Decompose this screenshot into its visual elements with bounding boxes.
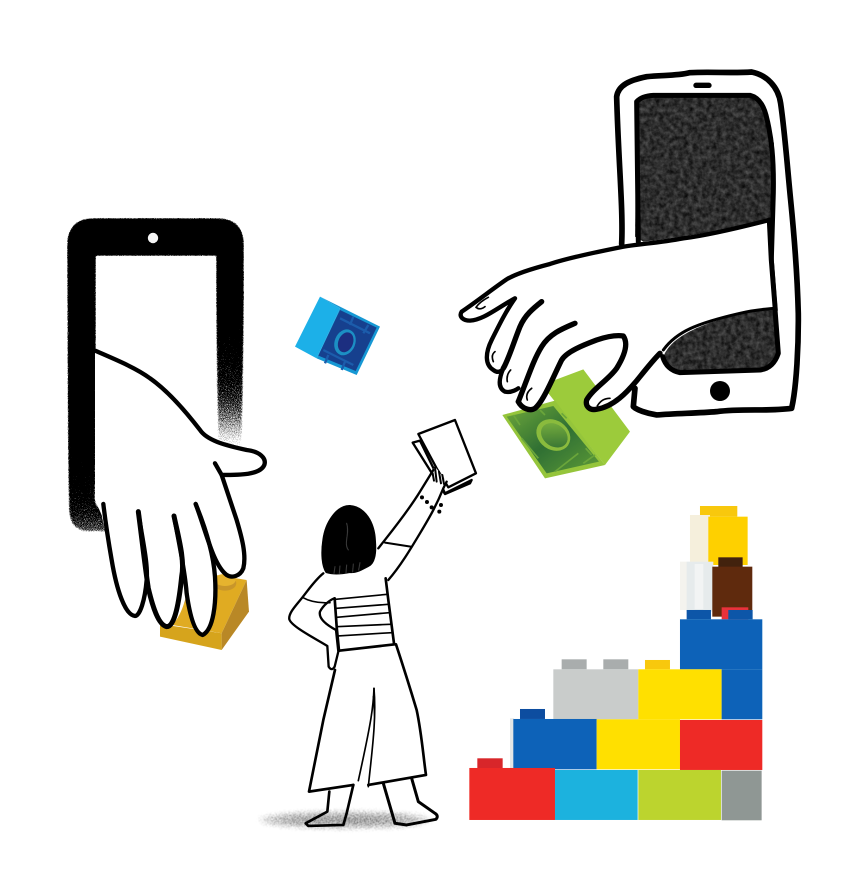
row two bbox=[510, 709, 762, 770]
row three bbox=[553, 659, 762, 719]
left phone camera dot bbox=[148, 233, 158, 243]
green brick bbox=[502, 369, 630, 478]
right phone screen bbox=[635, 95, 778, 373]
yellow brick bbox=[160, 570, 249, 650]
row one bbox=[469, 758, 762, 820]
top yellow and cream bricks bbox=[690, 506, 748, 565]
person bbox=[289, 420, 476, 826]
papers bbox=[413, 420, 476, 494]
white and brown bricks bbox=[680, 557, 752, 617]
upper studs bbox=[687, 607, 753, 619]
torso with stripes bbox=[289, 550, 395, 670]
right phone home button bbox=[710, 381, 730, 401]
left phone frame bbox=[68, 219, 243, 532]
raised arm bbox=[378, 467, 447, 580]
right hand bbox=[460, 219, 775, 410]
feet bbox=[306, 778, 437, 826]
left hand bbox=[95, 351, 265, 635]
trousers bbox=[309, 644, 426, 792]
brick stack bbox=[469, 506, 762, 820]
ground shadow bbox=[252, 810, 438, 830]
blue floating brick bbox=[295, 297, 380, 375]
right phone outline bbox=[617, 72, 798, 415]
right phone speaker bbox=[693, 83, 712, 88]
hair bbox=[322, 505, 376, 574]
row four bbox=[680, 619, 762, 669]
